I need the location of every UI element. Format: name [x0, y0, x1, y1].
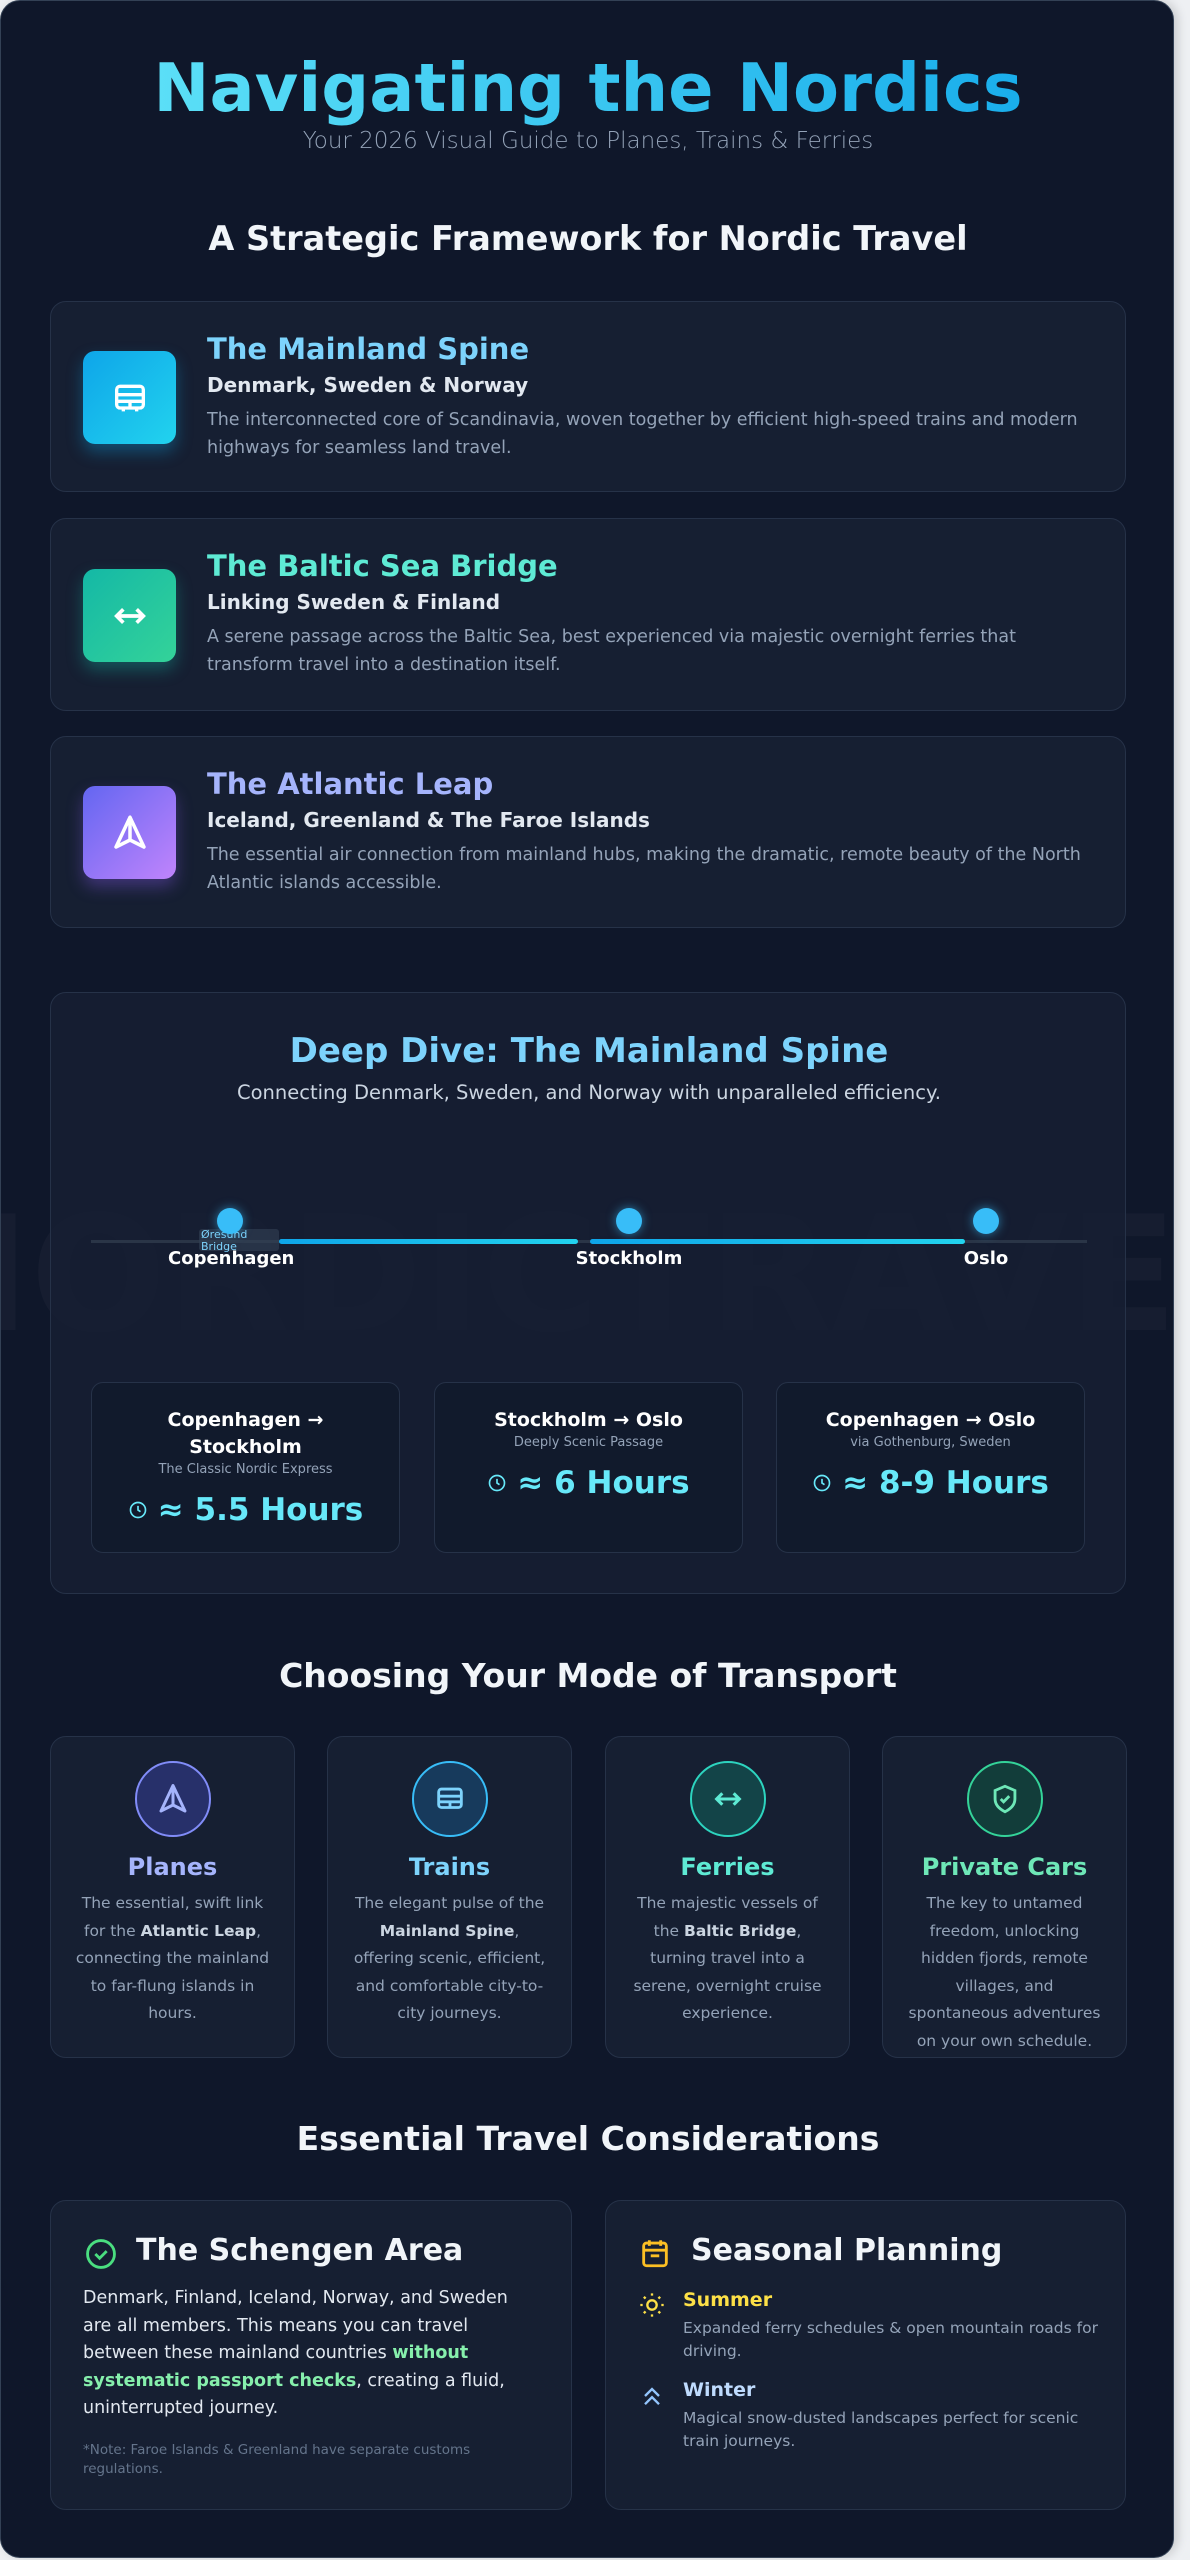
mode card: trains: The elegant pulse of the Mainland Spine, offering scenic, efficient, and comfortable city-to-city journeys. [354, 1894, 545, 2022]
route card: cph-sto: The Classic Nordic Express [158, 1462, 333, 1477]
title [1, 43, 1175, 133]
item: winter: Winter [683, 2379, 755, 2401]
icon: check circle [86, 2239, 116, 2269]
panel: atlantic leap: Iceland, Greenland & The Faroe Islands [207, 808, 650, 832]
panel: mainland spine: The interconnected core of Scandinavia, woven together by efficient high-speed trains and modern highways for seamless land travel. [207, 410, 1078, 458]
subtitle: Your 2026 Visual Guide to Planes, Trains & Ferries [303, 128, 873, 154]
stop: oslo: Oslo [964, 1248, 1008, 1269]
route card: sto-osl: ≈ 6 Hours [517, 1465, 690, 1501]
stop: stockholm: Stockholm [576, 1248, 682, 1269]
heading: framework: A Strategic Framework for Nordic Travel [208, 219, 968, 258]
subtitle: deep dive: Connecting Denmark, Sweden, and Norway with unparalleled efficiency. [237, 1081, 941, 1104]
stop: stockholm [576, 1202, 682, 1269]
mode card: ferries [605, 1736, 850, 2058]
panel: mainland spine: The Mainland Spine [207, 332, 529, 366]
stop: copenhagen: Copenhagen [168, 1248, 294, 1269]
item: summer: Expanded ferry schedules & open mountain roads for driving. [683, 2319, 1098, 2360]
heading: transport: Choosing Your Mode of Transport [279, 1656, 897, 1695]
route card: sto-osl: Stockholm → Oslo [494, 1409, 683, 1431]
heading: deep dive: Deep Dive: The Mainland Spine [290, 1031, 888, 1071]
route card: sto-osl [434, 1382, 743, 1553]
panel: seasonal [605, 2200, 1126, 2510]
title: Navigating the Nordics [153, 49, 1023, 127]
icon: train [83, 351, 176, 444]
mode card: planes: Planes [128, 1853, 217, 1881]
stop: oslo [964, 1202, 1008, 1269]
panel: baltic bridge: The Baltic Sea Bridge [207, 549, 558, 583]
panel: atlantic leap [50, 736, 1126, 928]
panel: baltic bridge: Linking Sweden & Finland [207, 590, 500, 614]
route card: cph-sto: Stockholm [189, 1436, 302, 1458]
panel: baltic bridge [50, 518, 1126, 711]
item: summer [640, 2289, 1098, 2360]
mode card: cars [882, 1736, 1127, 2058]
label: oresund bridge: Øresund [201, 1228, 247, 1241]
panel: baltic bridge: A serene passage across the Baltic Sea, best experienced via majestic overnight ferries that transform travel into a destination itself. [207, 627, 1016, 675]
panel: schengen: The Schengen Area [136, 2233, 463, 2268]
panel: mainland spine [50, 301, 1126, 492]
route card: cph-osl [776, 1382, 1085, 1553]
mode card: cars: The key to untamed freedom, unlocking hidden fjords, remote villages, and spontaneous adventures on your own schedule. [909, 1894, 1100, 2050]
panel: schengen [50, 2200, 572, 2510]
mode card: trains [327, 1736, 572, 2058]
icon: shield circle [967, 1761, 1043, 1837]
route card: cph-sto: Copenhagen → [168, 1409, 323, 1431]
route card: cph-osl: via Gothenburg, Sweden [850, 1435, 1011, 1450]
panel: schengen: *Note: Faroe Islands & Greenland have separate customs regulations. [83, 2442, 470, 2477]
panel: atlantic leap: The Atlantic Leap [207, 767, 493, 801]
mode card: ferries: Ferries [680, 1853, 775, 1881]
icon: calendar [642, 2240, 668, 2268]
mode card: cars: Private Cars [922, 1853, 1087, 1881]
mode card: planes: The essential, swift link for the Atlantic Leap, connecting the mainland to far-flung islands in hours. [76, 1894, 269, 2022]
route card: cph-sto [91, 1382, 400, 1553]
item: winter [644, 2379, 1078, 2450]
mode card: trains: Trains [409, 1853, 490, 1881]
route card: cph-sto: ≈ 5.5 Hours [158, 1492, 363, 1528]
route card: sto-osl: Deeply Scenic Passage [514, 1435, 663, 1450]
icon: ferry arrows [83, 569, 176, 662]
panel: deep dive [50, 992, 1126, 1594]
item: summer: Summer [683, 2289, 772, 2311]
stop: copenhagen [168, 1202, 294, 1269]
route card: cph-osl: ≈ 8-9 Hours [842, 1465, 1049, 1501]
panel: seasonal: Seasonal Planning [691, 2233, 1002, 2268]
mode card: ferries: The majestic vessels of the Baltic Bridge, turning travel into a serene, overnight cruise experience. [633, 1894, 822, 2022]
panel: schengen: Denmark, Finland, Iceland, Norway, and Sweden are all members. This means you can travel between these mainland countries without systematic passport checks, creating a fluid, uninterrupted journey. [83, 2288, 508, 2418]
timeline [91, 1202, 1087, 1269]
mode card: planes [50, 1736, 295, 2058]
panel: atlantic leap: The essential air connection from mainland hubs, making the dramatic, remote beauty of the North Atlantic islands accessible. [207, 845, 1081, 893]
label: oresund bridge [199, 1229, 279, 1251]
item: winter: Magical snow-dusted landscapes perfect for scenic train journeys. [683, 2409, 1078, 2450]
heading: considerations: Essential Travel Considerations [297, 2119, 879, 2158]
icon: plane circle [135, 1761, 211, 1837]
panel: mainland spine: Denmark, Sweden & Norway [207, 373, 528, 397]
route card: cph-osl: Copenhagen → Oslo [826, 1409, 1035, 1431]
icon: ferry circle [690, 1761, 766, 1837]
label: oresund bridge: Bridge [201, 1240, 237, 1253]
icon: plane [83, 786, 176, 879]
icon: train circle [412, 1761, 488, 1837]
